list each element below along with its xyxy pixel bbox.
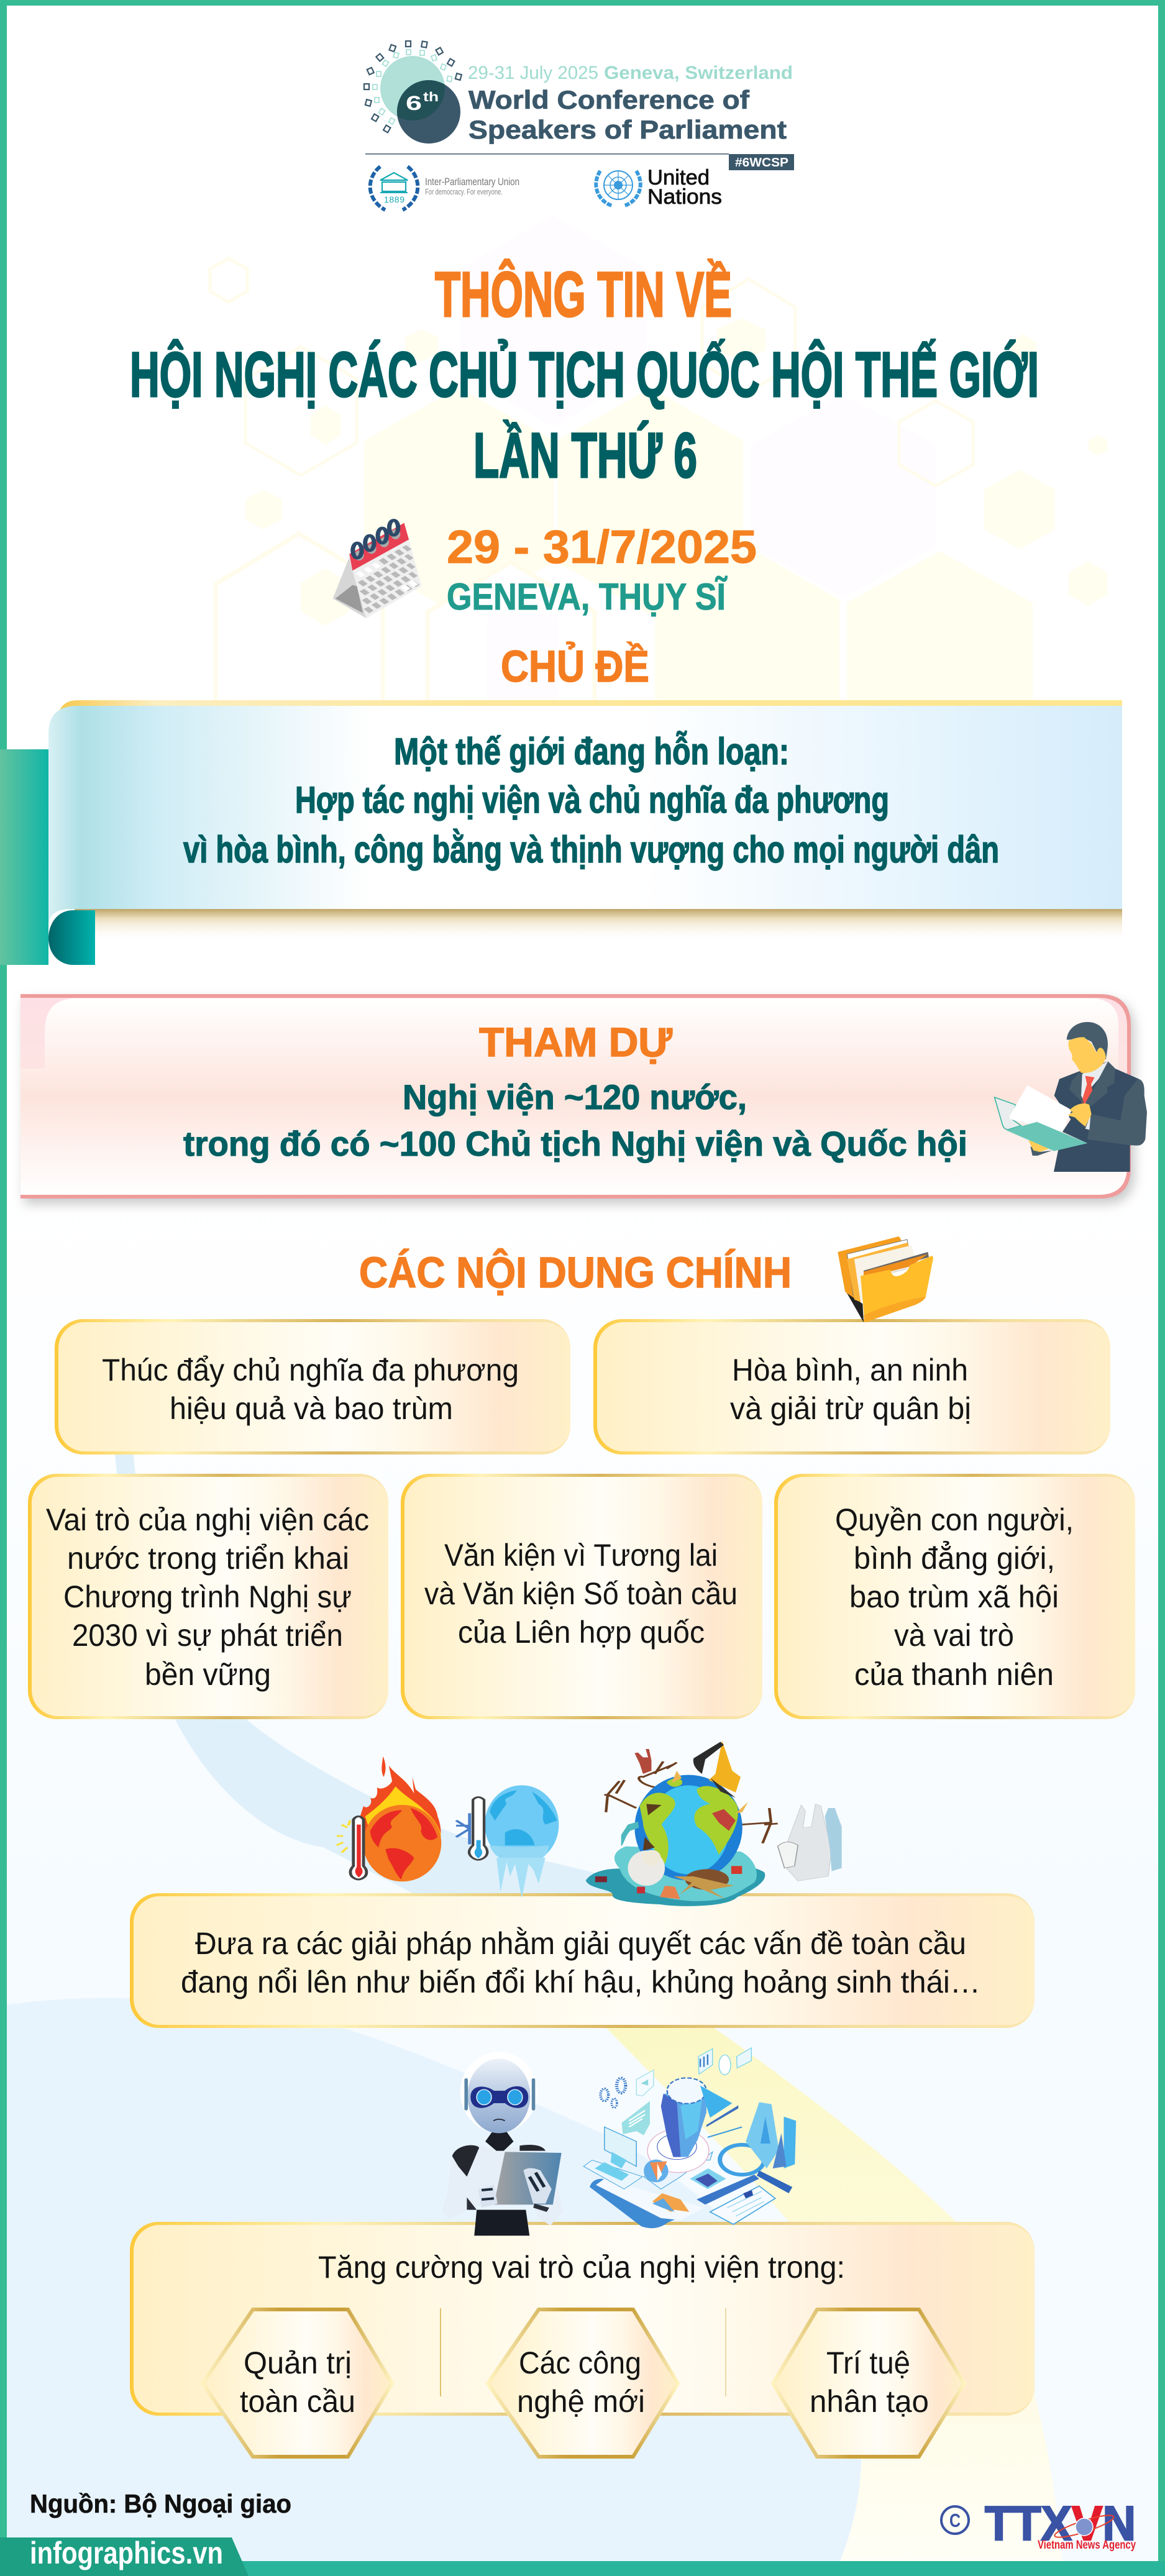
icon: folder <box>838 1236 933 1322</box>
TTXVN logo: C <box>949 2510 961 2531</box>
icon: frozen earth <box>456 1785 559 1898</box>
panel intro text: Tăng cường vai trò của nghị viện trong: <box>318 2250 845 2285</box>
icon: calendar <box>333 520 421 618</box>
card: pact for the future <box>401 1474 762 1719</box>
attendance text: trong đó có ~100 Chủ tịch Nghị viện và Quốc hội <box>183 1124 967 1163</box>
attendance text: THAM DỰ <box>479 1019 672 1065</box>
card: peace and security <box>593 1319 1110 1455</box>
logo date and place <box>468 63 793 83</box>
conference logo <box>364 41 794 210</box>
title: THÔNG TIN VỀ <box>435 259 732 330</box>
theme text: Một thế giới đang hỗn loạn: <box>394 731 789 772</box>
icons: climate and ecology <box>337 1741 842 1906</box>
background: hexagons <box>210 216 1107 746</box>
panel: global issues: đang nổi lên như biến đổi khí hậu, khủng hoảng sinh thái… <box>181 1965 980 1999</box>
IPU logo <box>370 167 519 210</box>
card: human rights: Quyền con người, <box>835 1502 1074 1537</box>
location: GENEVA, THỤY SĨ <box>447 576 728 618</box>
card: role of parliaments <box>28 1474 388 1719</box>
hashtag: #6WCSP <box>735 156 788 170</box>
attendance text <box>183 1019 967 1163</box>
TTXVN logo: TTXVN <box>985 2496 1136 2551</box>
panel: global issues <box>130 1893 1035 2028</box>
card: human rights <box>774 1474 1135 1719</box>
IPU logo: 1889 <box>384 194 404 204</box>
logo conference name: Speakers of Parliament <box>468 115 787 144</box>
IPU logo: For democracy. For everyone. <box>425 187 503 196</box>
logo conference name <box>468 85 787 144</box>
card: pact for the future: của Liên hợp quốc <box>458 1615 705 1650</box>
IPU logo: Inter-Parliamentary Union <box>425 176 519 188</box>
card: role of parliaments: Vai trò của nghị viện các <box>46 1502 369 1537</box>
card: multilateralism <box>55 1319 570 1455</box>
source: Nguồn: Bộ Ngoại giao <box>30 2489 291 2518</box>
card: multilateralism: Thúc đẩy chủ nghĩa đa phương <box>102 1353 519 1387</box>
panel: strengthening the role of parliaments <box>130 2222 1035 2457</box>
card: peace and security: Hòa bình, an ninh <box>732 1353 968 1387</box>
card: role of parliaments: 2030 vì sự phát triển <box>72 1618 343 1653</box>
logo conference name: World Conference of <box>468 85 750 114</box>
card: pact for the future: Văn kiện vì Tương lai <box>444 1538 718 1573</box>
card: human rights: của thanh niên <box>854 1657 1054 1692</box>
logo emblem: th <box>423 90 439 104</box>
icon: plastic waste <box>778 1804 842 1881</box>
hexagon: artificial intelligence: Trí tuệ <box>826 2345 910 2380</box>
card: role of parliaments: Chương trình Nghị sự <box>63 1579 352 1614</box>
icon: burning earth <box>337 1756 441 1881</box>
hexagon: global governance: toàn cầu <box>240 2384 355 2419</box>
theme text: Hợp tác nghị viện và chủ nghĩa đa phương <box>295 779 889 821</box>
hexagon: new technologies <box>488 2309 678 2457</box>
hexagon: artificial intelligence: nhân tạo <box>810 2384 929 2419</box>
card: human rights: bình đẳng giới, <box>854 1540 1055 1576</box>
logo date and place: Geneva, Switzerland <box>604 63 793 83</box>
hexagon: global governance: Quản trị <box>244 2345 352 2380</box>
card: role of parliaments: nước trong triển khai <box>67 1541 349 1576</box>
logo emblem <box>364 41 462 144</box>
icon: robot with tablet <box>442 2052 563 2236</box>
United Nations logo: Nations <box>647 185 722 209</box>
theme text <box>183 731 999 870</box>
title <box>130 259 1039 491</box>
hexagon: global governance <box>203 2309 392 2457</box>
card: pact for the future: và Văn kiện Số toàn cầu <box>424 1576 738 1611</box>
card: multilateralism: hiệu quả và bao trùm <box>170 1391 453 1426</box>
logo emblem: 6 <box>406 92 422 114</box>
card: peace and security: và giải trừ quân bị <box>730 1391 971 1426</box>
panel: attendance <box>21 994 1147 1199</box>
panel: theme banner <box>0 700 1122 965</box>
hexagon: new technologies: nghệ mới <box>517 2384 645 2419</box>
background: pale swirl shapes <box>7 1454 1062 2563</box>
hashtag <box>729 154 794 170</box>
heading: theme: CHỦ ĐỀ <box>501 642 649 692</box>
attendance text: Nghị viện ~120 nước, <box>403 1077 747 1117</box>
title: LẦN THỨ 6 <box>473 420 697 491</box>
TTXVN logo: Vietnam News Agency <box>1038 2539 1136 2552</box>
United Nations logo: United <box>647 166 710 190</box>
heading: main contents: CÁC NỘI DUNG CHÍNH <box>359 1248 792 1297</box>
date: 29 - 31/7/2025 <box>447 521 757 573</box>
logo date and place: 29-31 July 2025 <box>468 63 598 83</box>
United Nations logo <box>596 166 722 209</box>
icon: AI technology illustration <box>583 2048 796 2228</box>
icon: man reading <box>995 1022 1147 1172</box>
hexagon: new technologies: Các công <box>519 2345 641 2380</box>
footer tab: infographics.vn <box>30 2536 223 2570</box>
card: human rights: bao trùm xã hội <box>849 1579 1059 1614</box>
card: role of parliaments: bền vững <box>145 1657 271 1692</box>
panel: global issues: Đưa ra các giải pháp nhằm giải quyết các vấn đề toàn cầu <box>195 1926 966 1961</box>
hexagon: artificial intelligence <box>773 2309 964 2457</box>
icon: damaged ecosystem <box>586 1741 778 1906</box>
card: human rights: và vai trò <box>894 1618 1014 1653</box>
